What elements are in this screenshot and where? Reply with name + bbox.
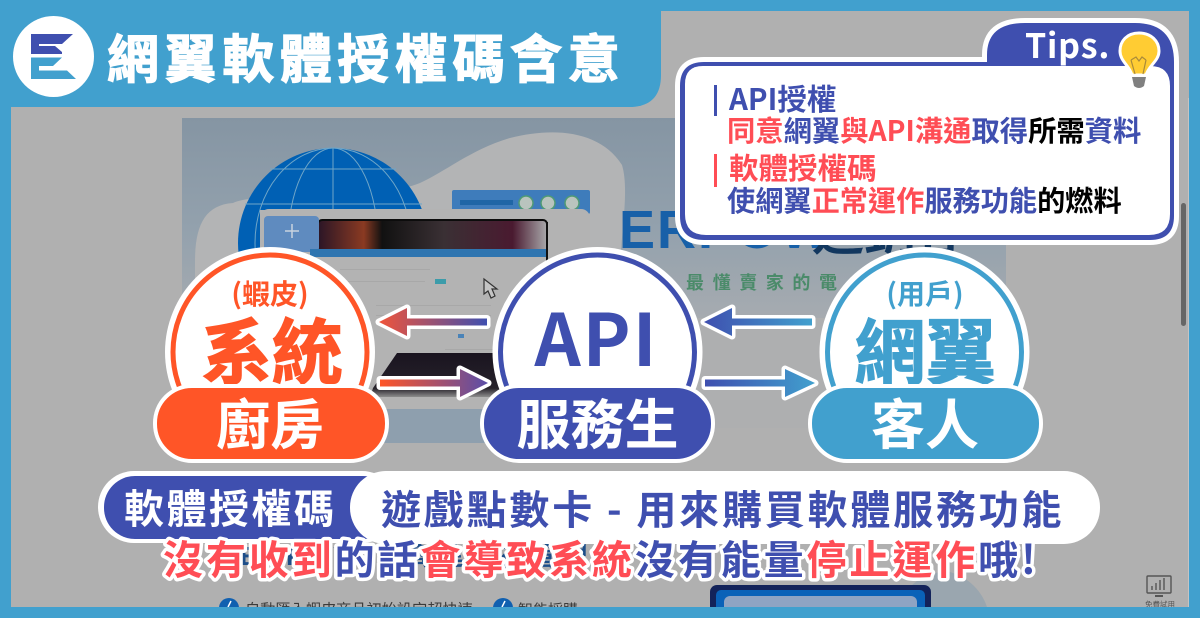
ERP brand heading [622,211,954,291]
software license analogy bar: 遊戲點數卡 - 用來購買軟體服務功能 [381,478,1064,536]
ERP brand heading: 進銷存 [812,190,968,265]
warning caption: 沒有收到的話會導致系統沒有能量停止運作哦! [163,528,1039,586]
tips label: Tips. [1025,19,1110,68]
node: API / waiter: API [534,282,658,387]
cursor [484,279,497,298]
arrow: website to API [704,308,812,336]
node: system / kitchen [155,247,387,461]
node: website / customer: 客人 [871,381,979,460]
mini browser window [452,190,590,214]
node: website / customer: 網翼 [854,297,997,399]
node: API / waiter: 服務生 [516,381,678,460]
lower website fragments: ERPOW 電商進銷存管理 [240,541,592,571]
website banner [182,118,1006,443]
tips card [680,19,1174,240]
node: website / customer: (用戶) [886,273,964,313]
node: system / kitchen: (蝦皮) [231,273,309,313]
logo [13,16,94,97]
title: 網翼軟體授權碼含意 [107,18,625,93]
software license analogy bar: 軟體授權碼 [124,477,336,535]
node: API / waiter [482,247,713,461]
tip: API authorization: API授權 [728,77,836,119]
tip: software license code [714,154,1122,214]
globe [238,148,422,252]
software license analogy bar [98,471,1100,544]
header banner [11,11,661,107]
ERP brand heading: 最懂賣家的電 [686,269,846,295]
node: system / kitchen: 廚房 [216,381,324,460]
arrow: API to system [379,308,487,336]
scrollbar [1181,98,1189,607]
arrow: API to website [705,369,815,397]
node: website / customer [810,247,1041,461]
tip: software license code: 軟體授權碼 [729,146,877,188]
tip: API authorization [714,84,1141,144]
lower website fragments [219,544,1174,607]
tip: API authorization: 同意網翼與API溝通取得所需資料 [727,109,1141,150]
free trial icon: 免費試用 [1145,599,1175,610]
ERP brand heading: ERPOW [619,200,833,260]
free trial icon [1145,576,1175,610]
tip: software license code: 使網翼正常運作服務功能的燃料 [727,179,1122,220]
arrow: system to API [380,369,488,397]
icon: light bulb [1120,33,1159,88]
node: system / kitchen: 系統 [201,297,343,399]
laptop mockup panel [260,209,590,443]
